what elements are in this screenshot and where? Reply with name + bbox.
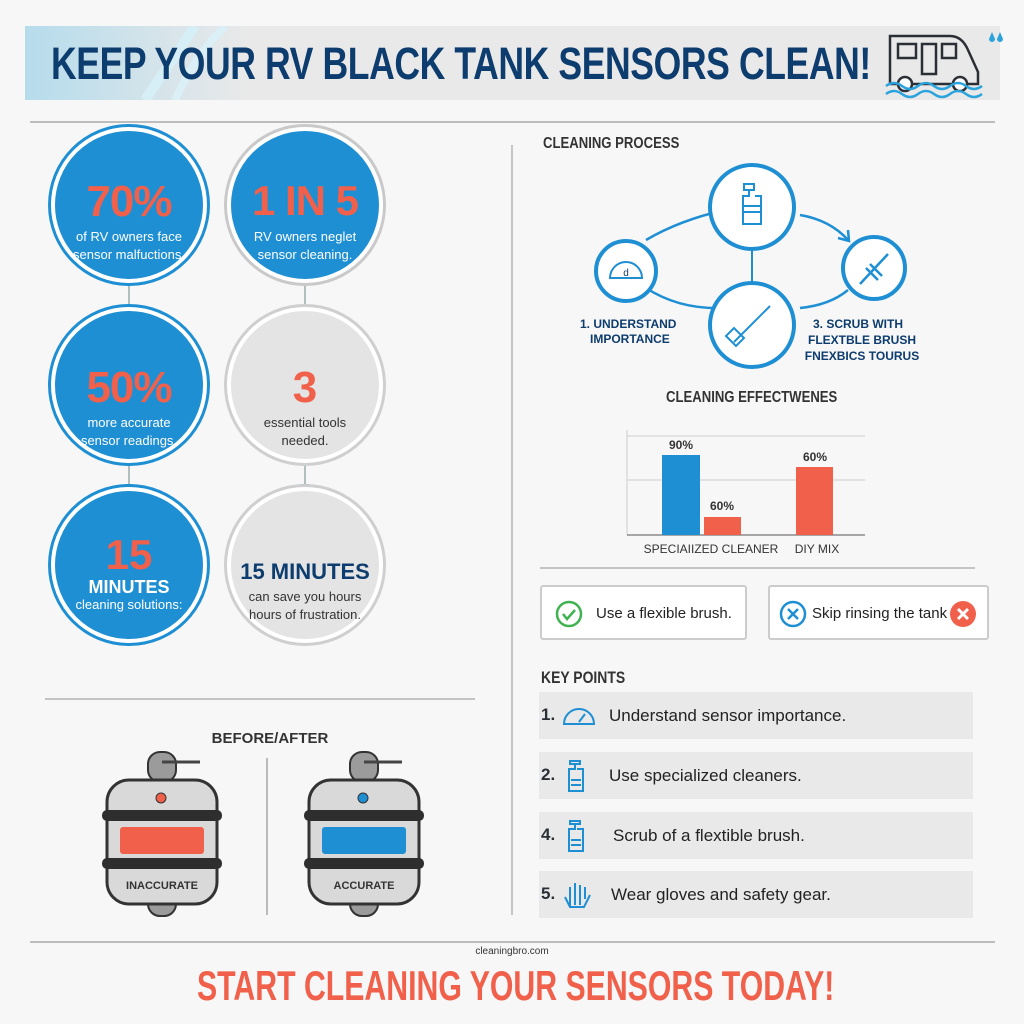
stat circle: 3 tools: needed. xyxy=(282,433,328,448)
process diagram: 3. SCRUB WITH xyxy=(813,317,903,331)
stat circle: 15 minutes save xyxy=(227,487,383,643)
row 4 xyxy=(539,871,973,918)
bar chart: 60% xyxy=(710,499,734,513)
do box xyxy=(540,585,747,640)
stat circle: 15 minutes: 15 xyxy=(106,531,152,578)
process diagram xyxy=(580,163,919,369)
tank: inaccurate xyxy=(102,751,222,917)
process diagram: 1. UNDERSTAND xyxy=(580,317,677,331)
key point rows xyxy=(539,692,973,918)
row 3: Scrub of a flextible brush. xyxy=(613,826,805,845)
source text: cleaningbro.com xyxy=(475,946,549,957)
row 2 xyxy=(539,752,973,799)
bar chart: 60% xyxy=(803,450,827,464)
stat circle: 1 in 5: 1 IN 5 xyxy=(252,177,358,224)
bar chart xyxy=(626,430,865,556)
tank: inaccurate: INACCURATE xyxy=(126,880,198,892)
don't box: Skip rinsing the tank xyxy=(812,605,947,622)
process diagram: IMPORTANCE xyxy=(590,332,670,346)
process diagram: FLEXTBLE BRUSH xyxy=(808,333,916,347)
heading: before/after: BEFORE/AFTER xyxy=(212,730,328,747)
bar chart: SPECIAIIZED CLEANER xyxy=(644,542,779,556)
stat circle: 70%: of RV owners face xyxy=(76,229,182,244)
row 3 xyxy=(539,812,973,859)
stat circle: 50%: 50% xyxy=(86,363,172,412)
row 3: 4. xyxy=(541,825,555,844)
row 2: 2. xyxy=(541,765,555,784)
icon: RV xyxy=(885,32,1003,98)
stat circle: 15 minutes save: 15 MINUTES xyxy=(240,559,370,584)
process diagram: FNEXBICS TOURUS xyxy=(805,349,919,363)
stat circle: 70%: sensor malfuctions. xyxy=(73,247,185,262)
header banner xyxy=(25,26,1000,100)
process diagram: d xyxy=(623,268,629,279)
stat circle: 1 in 5 xyxy=(227,127,383,283)
footer call to action: START CLEANING YOUR SENSORS TODAY! xyxy=(197,962,834,1009)
stat circle: 15 minutes xyxy=(51,487,207,643)
stat circle: 50%: more accurate xyxy=(87,415,171,430)
tank: accurate xyxy=(304,751,424,917)
row 4: Wear gloves and safety gear. xyxy=(611,885,831,904)
row 1: 1. xyxy=(541,705,555,724)
stat circle: 1 in 5: RV owners neglet xyxy=(254,229,356,244)
stat circle: 70%: 70% xyxy=(86,177,172,226)
stat circle: 15 minutes: cleaning solutions: xyxy=(76,597,182,612)
heading: key points: KEY POINTS xyxy=(541,668,625,687)
heading: cleaning effectiveness: CLEANING EFFECTWENES xyxy=(666,389,837,406)
don't box xyxy=(768,585,989,640)
tank: accurate: ACCURATE xyxy=(334,880,394,892)
stat circle: 50%: sensor readings. xyxy=(81,433,177,448)
stat circle: 70% xyxy=(51,127,207,283)
stat circle: 50% xyxy=(51,307,207,463)
stat circle: 15 minutes: MINUTES xyxy=(88,577,170,597)
stat circle: 3 tools: 3 xyxy=(293,363,317,412)
title: KEEP YOUR RV BLACK TANK SENSORS CLEAN! xyxy=(51,38,871,89)
row 2: Use specialized cleaners. xyxy=(609,766,802,785)
row 1: Understand sensor importance. xyxy=(609,706,846,725)
stat circle: 3 tools xyxy=(227,307,383,463)
row 4: 5. xyxy=(541,884,555,903)
connectors xyxy=(125,286,309,484)
heading: cleaning process: CLEANING PROCESS xyxy=(543,135,679,152)
bar chart: DIY MIX xyxy=(795,542,839,556)
stat circle: 15 minutes save: can save you hours xyxy=(249,589,361,604)
stat circle: 1 in 5: sensor cleaning. xyxy=(258,247,352,262)
row 1 xyxy=(539,692,973,739)
bar chart: 90% xyxy=(669,438,693,452)
stat circle: 15 minutes save: hours of frustration. xyxy=(249,607,361,622)
do box: Use a flexible brush. xyxy=(596,605,732,622)
stat circle: 3 tools: essential tools xyxy=(264,415,346,430)
